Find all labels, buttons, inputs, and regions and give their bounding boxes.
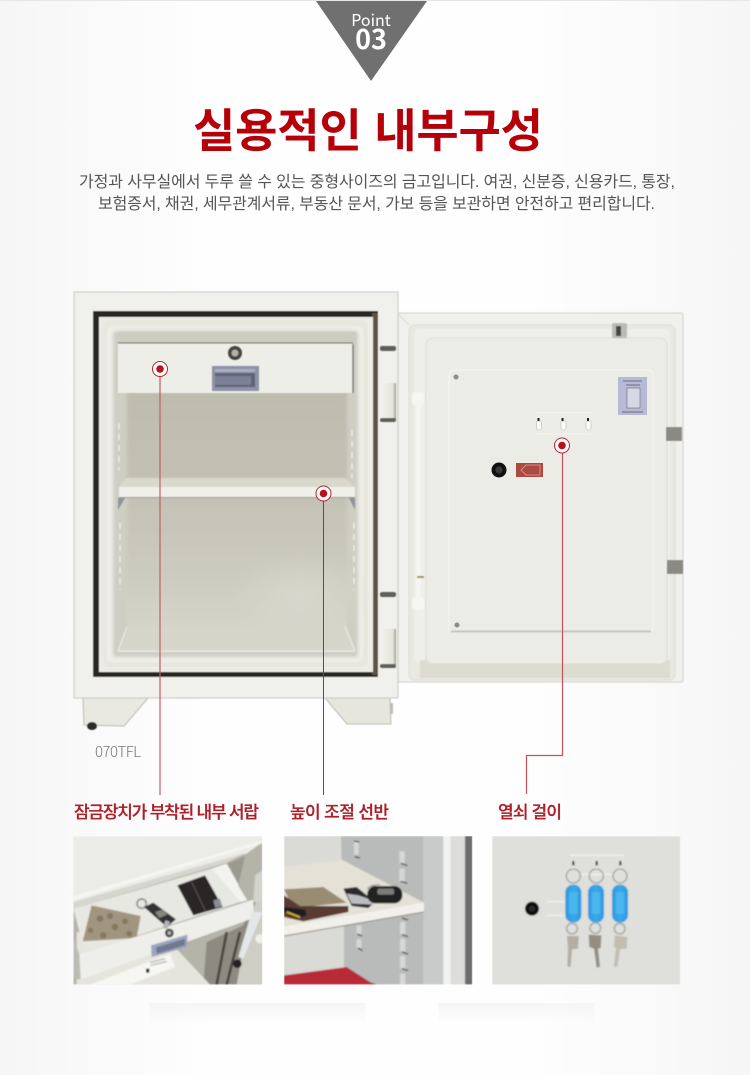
marker: shelf: [316, 486, 331, 501]
marker: drawer: [152, 362, 168, 376]
marker: key hooks: [554, 438, 570, 453]
label: internal drawer: 잠금장치가 부착된 내부 서랍: [74, 803, 259, 822]
label: key hooks: 열쇠 걸이: [498, 803, 562, 822]
drawer lock and handle: [212, 346, 259, 391]
photo: drawer: [73, 836, 265, 985]
faint reflection under photos: [149, 1003, 595, 1025]
model name: 070TFL: [95, 741, 141, 762]
description text: [79, 173, 675, 213]
description text: 가정과 사무실에서 두루 쓸 수 있는 중형사이즈의 금고입니다. 여권, 신분증, 신용카드, 통장,: [79, 173, 675, 191]
point badge: 03: [355, 18, 387, 57]
point badge: Point: [351, 7, 391, 31]
safe door, inner side: [397, 313, 683, 682]
photo: adjustable shelf: [284, 836, 472, 985]
callout line: shelf: [322, 493, 324, 795]
door fittings: [454, 374, 647, 628]
photo: key hooks: [492, 836, 680, 985]
point badge: [316, 1, 427, 81]
title: 실용적인 내부구성: [193, 105, 543, 157]
safe body with open interior: [74, 292, 398, 730]
label: adjustable shelf: 높이 조절 선반: [290, 803, 389, 822]
callout line: drawer: [159, 369, 161, 795]
callout line: key hooks: [526, 445, 562, 794]
description text: 보험증서, 채권, 세무관계서류, 부동산 문서, 가보 등을 보관하면 안전하고 편리합니다.: [98, 195, 655, 213]
